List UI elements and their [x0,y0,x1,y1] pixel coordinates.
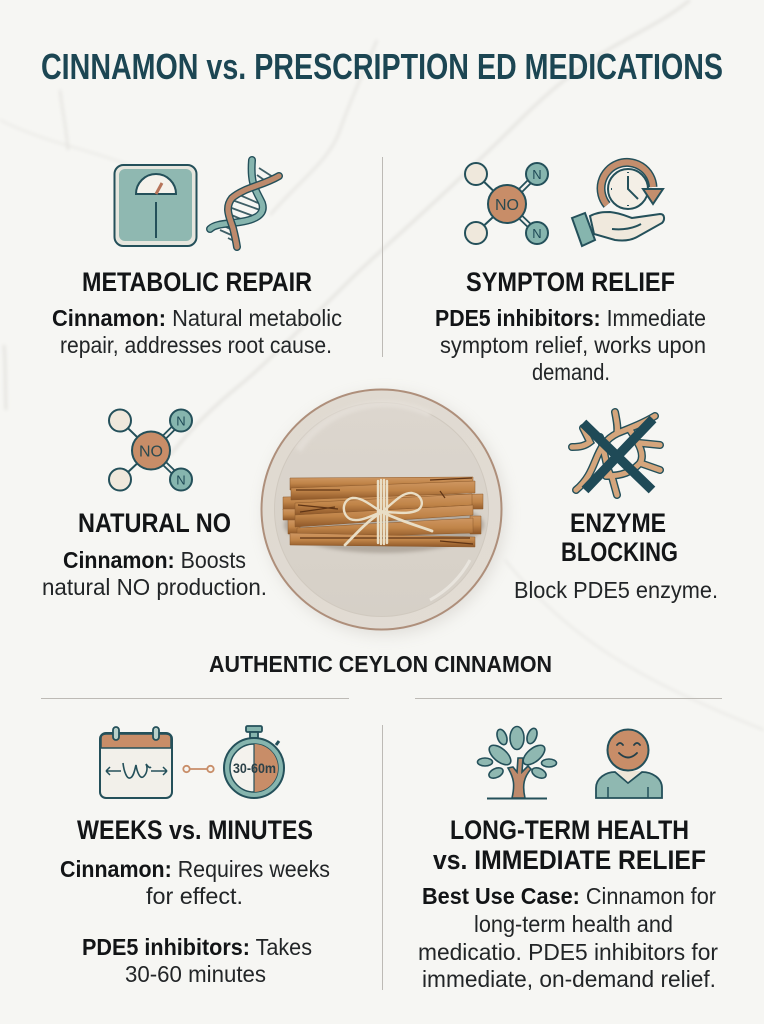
icon: tree [478,726,556,798]
text block: long-term health and [474,911,673,937]
heading: LONG-TERM HEALTH [450,815,689,845]
icon: weighing scale [114,165,196,246]
icon: nitric oxide molecule [465,163,548,244]
text block [435,305,706,385]
text block: Cinnamon: Requires weeks [60,856,330,882]
panel: weeks vs. minutes [60,726,330,987]
heading: vs. IMMEDIATE RELIEF [433,845,706,875]
text block: for effect. [146,883,243,909]
text block: 30-60 minutes [125,961,266,987]
heading: SYMPTOM RELIEF [466,267,675,297]
twine bow [344,480,432,545]
text block: PDE5 inhibitors: Takes [82,934,312,960]
text block: Block PDE5 enzyme. [514,577,718,603]
text block [42,547,267,600]
icon: nitric oxide molecule [109,410,192,490]
text block [418,883,718,992]
panel: symptom relief [435,162,706,385]
panel: long-term health vs. immediate relief [418,726,718,992]
panel: central plate with cinnamon [262,390,505,634]
text block: immediate, on-demand relief. [422,966,716,992]
text block: Cinnamon: Boosts [63,547,246,573]
heading: ENZYME [570,508,666,538]
cinnamon sticks bundle [283,477,484,553]
icon: DNA helix [210,160,279,247]
heading [433,815,706,875]
heading [561,508,678,567]
text block: demand. [532,359,610,385]
icon: calendar [100,727,172,798]
text block: repair, addresses root cause. [60,332,332,358]
icon: stopwatch: 30-60m [233,760,276,776]
panel: metabolic repair [52,160,342,358]
text block: Cinnamon: Natural metabolic [52,305,342,331]
text block [60,856,330,987]
text block [52,305,342,358]
heading: WEEKS vs. MINUTES [77,815,313,845]
divider: horizontal right [415,698,722,700]
icon: connector [183,766,214,772]
panel: natural NO [42,410,267,600]
panel: enzyme blocking [514,412,718,603]
divider: top vertical [382,157,384,357]
heading: NATURAL NO [78,508,231,538]
icon: hand with clock [572,162,664,246]
text block: natural NO production. [42,574,267,600]
icon: stopwatch [224,726,284,798]
text block: Best Use Case: Cinnamon for [422,883,716,909]
divider: bottom vertical [382,725,384,990]
text block: symptom relief, works upon [440,332,706,358]
heading: BLOCKING [561,537,678,567]
divider: horizontal left [41,698,349,700]
caption: AUTHENTIC CEYLON CINNAMON [209,651,552,677]
text block: PDE5 inhibitors: Immediate [435,305,706,331]
icon: smiling person [596,730,662,798]
icon: crossed enzyme [572,412,660,495]
heading: METABOLIC REPAIR [82,267,312,297]
plate [262,390,505,634]
text block: medicatio. PDE5 inhibitors for [418,939,718,965]
